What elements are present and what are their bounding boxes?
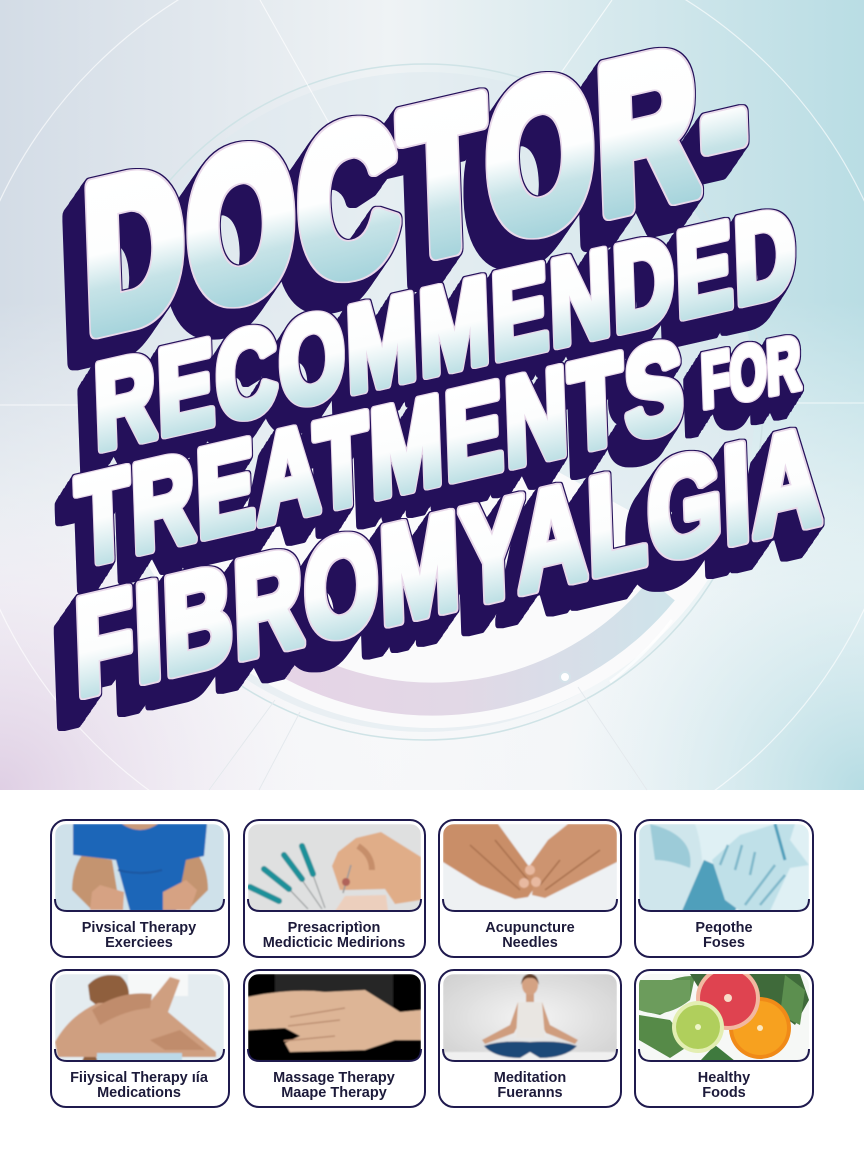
card: healthy foods <box>635 966 813 1107</box>
label: Presacriptìon <box>288 920 380 936</box>
image: woman meditating <box>443 974 617 1061</box>
frame curve <box>443 1049 617 1061</box>
frame curve <box>443 899 617 911</box>
label: Fiiysical Therapy ıía <box>70 1070 209 1086</box>
label line 2: Medicticic Medirions <box>263 935 405 951</box>
title line: RECOMMENDED: RECOMMENDED <box>92 182 800 476</box>
label: Pivsical Therapy <box>82 920 196 936</box>
card: meditation <box>439 970 621 1107</box>
grapefruit <box>696 966 760 1030</box>
label: Peqothe <box>695 920 753 936</box>
frame curve <box>639 899 809 911</box>
image: person in blue shirt <box>55 824 224 911</box>
lime <box>672 1001 724 1053</box>
image: back massage <box>55 974 224 1061</box>
label line 2: Medications <box>97 1085 181 1101</box>
label line 2: Exerciees <box>105 935 173 951</box>
image: gloved hands <box>639 824 809 911</box>
label: Meditation <box>494 1070 566 1086</box>
label line 2: Maape Therapy <box>281 1085 387 1101</box>
label: Healthy <box>698 1070 750 1086</box>
image: two hands <box>443 824 617 911</box>
title line: FIBROMYALGIA: FIBROMYALGIA <box>73 398 825 726</box>
orange <box>729 997 791 1059</box>
label line 2: Fueranns <box>497 1085 563 1101</box>
image: needles and hand <box>248 824 421 911</box>
card: prescription medications <box>244 820 425 957</box>
label line 2: Needles <box>502 935 558 951</box>
frame curve <box>248 1049 421 1061</box>
label line 2: Foods <box>702 1085 746 1101</box>
card: acupuncture needles <box>439 820 621 957</box>
frame curve <box>248 899 421 911</box>
decorative rings <box>0 0 864 883</box>
image: hands on black background <box>248 974 421 1061</box>
card: physical therapy exercises <box>51 820 229 957</box>
label: Massage Therapy <box>273 1070 395 1086</box>
frame curve <box>55 899 224 911</box>
image: citrus fruits and leaves <box>639 966 809 1061</box>
label: Acupuncture <box>485 920 575 936</box>
title line: TREATMENTS FOR: FOR <box>700 321 802 425</box>
card: pegothe foses <box>635 820 813 957</box>
title <box>73 0 825 726</box>
card: physical therapy medications <box>51 970 229 1107</box>
card: massage therapy <box>244 970 425 1107</box>
title line: TREATMENTS FOR: TREATMENTS <box>74 314 687 594</box>
label line 2: Foses <box>703 935 745 951</box>
frame curve <box>639 1049 809 1061</box>
frame curve <box>55 1049 224 1061</box>
title line: DOCTOR-: DOCTOR- <box>80 0 754 376</box>
